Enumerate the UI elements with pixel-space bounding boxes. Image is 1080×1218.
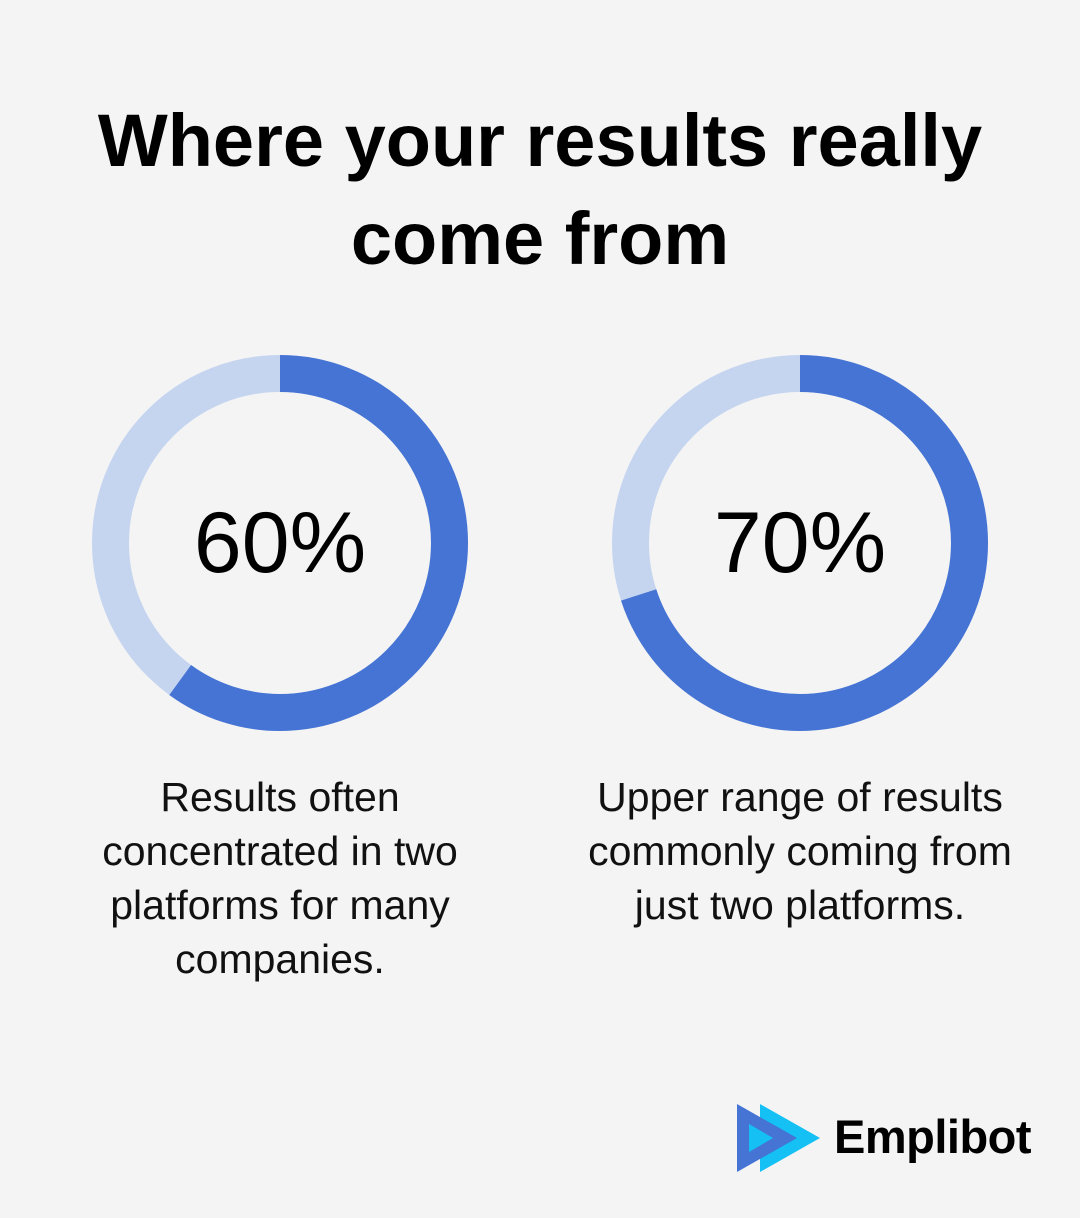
donut chart: 70%: 70% xyxy=(714,495,886,591)
title: Where your results really xyxy=(98,99,982,182)
donut chart: 60%: 60% xyxy=(194,495,366,591)
logo text: Emplibot xyxy=(834,1110,1031,1163)
icon: play triangles xyxy=(737,1104,820,1172)
donut chart: 70% xyxy=(612,355,988,731)
caption: 60%: Results often concentrated in two platforms for many companies. xyxy=(102,774,458,982)
logo: Emplibot xyxy=(737,1104,1031,1172)
title: come from xyxy=(351,197,729,280)
caption: 70%: Upper range of results commonly coming from just two platforms. xyxy=(588,774,1012,928)
donut chart: 60% xyxy=(92,355,468,731)
title xyxy=(98,99,982,280)
